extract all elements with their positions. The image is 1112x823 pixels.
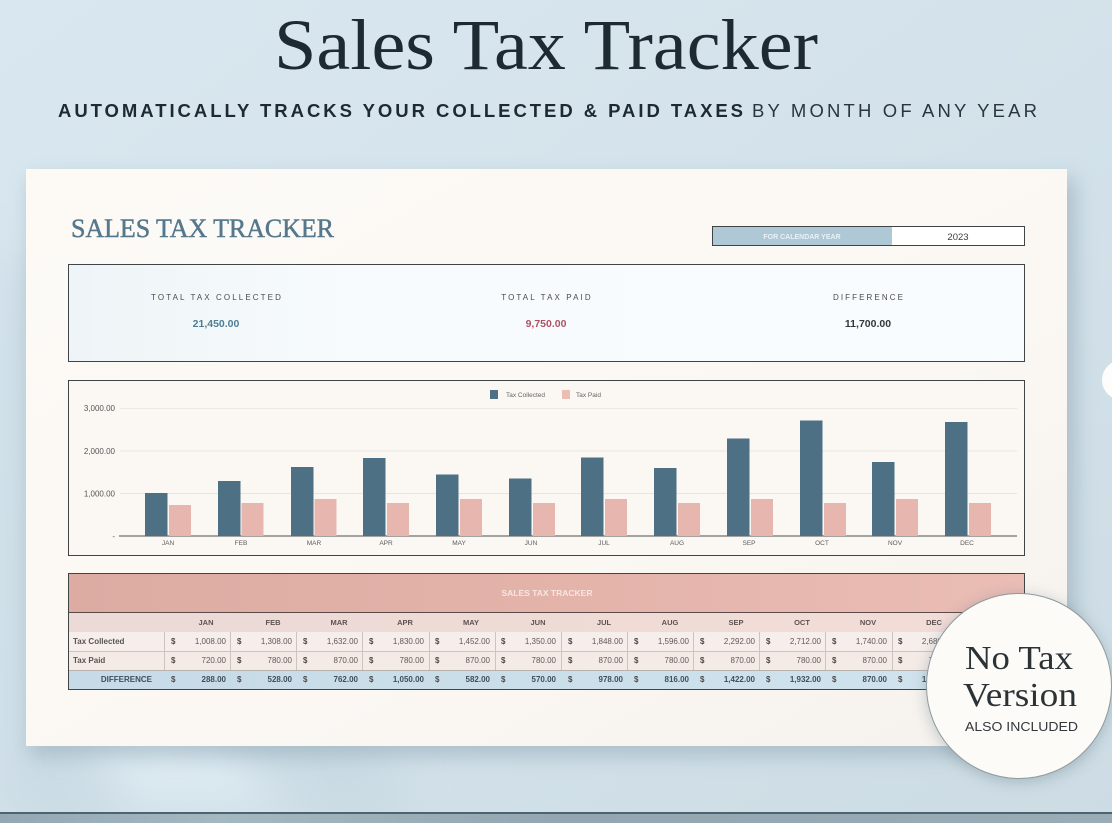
month labels: JUN: [525, 540, 538, 547]
dollar signs: $: [237, 637, 242, 646]
difference row: 978.00: [599, 675, 624, 684]
dollar signs: $: [766, 656, 771, 665]
sheet heading: SALES TAX TRACKER: [71, 214, 335, 243]
difference row: 1,932.00: [790, 675, 822, 684]
month labels: AUG: [670, 540, 684, 547]
difference: [833, 293, 905, 330]
calendar year selector: FOR CALENDAR YEAR: [763, 234, 841, 241]
tax collected row: 2,712.00: [790, 637, 822, 646]
dollar signs: $: [237, 656, 242, 665]
tax collected row: 2,680.00: [922, 637, 954, 646]
month labels: MAR: [307, 540, 322, 547]
dollar signs: $: [501, 656, 506, 665]
month labels: FEB: [235, 540, 247, 547]
callout: no tax version badge: No Tax: [965, 640, 1073, 677]
tax paid row: 870.00: [599, 656, 624, 665]
tax collected row: 1,008.00: [195, 637, 227, 646]
difference row: 1,050.00: [393, 675, 425, 684]
dollar signs: $: [832, 675, 837, 684]
tax paid row: 720.00: [202, 656, 227, 665]
tax collected row: [69, 632, 1025, 651]
subtitle: AUTOMATICALLY TRACKS YOUR COLLECTED & PAID TAXES: [58, 100, 743, 121]
table month header: APR: [397, 618, 413, 627]
difference row: 288.00: [202, 675, 227, 684]
dollar signs: $: [766, 637, 771, 646]
dollar signs: $: [369, 656, 374, 665]
dollar signs: $: [369, 637, 374, 646]
tax collected row: 1,596.00: [658, 637, 690, 646]
table month header: DEC: [926, 618, 942, 627]
tax collected row: 1,740.00: [856, 637, 888, 646]
table month header: JUL: [597, 618, 612, 627]
total tax paid: TOTAL TAX PAID: [501, 293, 593, 302]
dollar signs: $: [700, 656, 705, 665]
month labels: NOV: [888, 540, 903, 547]
chart axes: 2,000.00: [84, 447, 116, 456]
callout: no tax version badge: [926, 594, 1112, 781]
difference row: 1,900.00: [922, 675, 954, 684]
dollar signs: $: [435, 637, 440, 646]
dollar signs: $: [766, 675, 771, 684]
tax collected row: 1,830.00: [393, 637, 425, 646]
tax paid bars: [169, 499, 991, 536]
dollar signs: $: [303, 675, 308, 684]
chart axes: 1,000.00: [84, 490, 116, 498]
table month header: AUG: [662, 618, 678, 627]
dollar signs: $: [634, 675, 639, 684]
tax collected bars: [145, 420, 968, 536]
total tax paid: 9,750.00: [526, 318, 567, 330]
chart legend: Tax Collected: [506, 392, 545, 399]
difference row: 870.00: [863, 675, 888, 684]
total tax collected: 21,450.00: [193, 318, 240, 330]
difference row: 528.00: [268, 675, 293, 684]
month labels: JAN: [162, 540, 174, 547]
tax paid row: 870.00: [334, 656, 359, 665]
table month header: NOV: [860, 618, 876, 627]
calendar year selector: [712, 226, 1024, 246]
difference row: 1,422.00: [724, 675, 756, 684]
total tax paid: [501, 293, 593, 330]
tax paid row: 780.00: [400, 656, 425, 665]
tax paid row: [69, 651, 1025, 670]
month labels: JUL: [598, 540, 610, 547]
difference row: 582.00: [466, 675, 491, 684]
tax collected row: 1,350.00: [525, 637, 557, 646]
dollar signs: $: [303, 637, 308, 646]
dollar signs: $: [501, 675, 506, 684]
dollar signs: $: [435, 656, 440, 665]
tax paid row: 780.00: [532, 656, 557, 665]
table month header: MAR: [330, 618, 348, 627]
calendar year selector: 2023: [947, 232, 969, 243]
tax paid row: 870.00: [466, 656, 491, 665]
tax paid row: 780.00: [929, 656, 954, 665]
difference: DIFFERENCE: [833, 293, 905, 302]
panel: totals summary: [68, 264, 1024, 362]
chart axes: -: [112, 532, 115, 541]
dollar signs: $: [898, 637, 903, 646]
month labels: DEC: [960, 540, 974, 547]
dollar signs: $: [171, 675, 176, 684]
difference row: 816.00: [665, 675, 690, 684]
tax paid row: Tax Paid: [73, 656, 105, 665]
dollar signs: $: [898, 656, 903, 665]
panel: spreadsheet card: [26, 169, 1067, 746]
dollar signs: $: [369, 675, 374, 684]
panel: monthly data table: [68, 574, 1025, 690]
difference row: [69, 670, 1025, 689]
month labels: APR: [379, 540, 393, 547]
dollar signs: [171, 637, 903, 684]
callout: no tax version badge: Version: [963, 677, 1077, 714]
dollar signs: $: [700, 675, 705, 684]
subtitle: [58, 100, 1037, 121]
month labels: MAY: [452, 540, 466, 547]
tax paid row: 870.00: [731, 656, 756, 665]
table month header: MAY: [463, 618, 479, 627]
table month header: SEP: [728, 618, 744, 627]
tax collected row: 1,452.00: [459, 637, 491, 646]
subtitle: BY MONTH OF ANY YEAR: [752, 100, 1037, 121]
table month header: JAN: [198, 618, 214, 627]
month labels: SEP: [742, 540, 756, 547]
title: Sales Tax Tracker: [274, 5, 818, 85]
tax collected row: 1,308.00: [261, 637, 293, 646]
dollar signs: $: [171, 656, 176, 665]
table month header: JUN: [530, 618, 546, 627]
total tax collected: TOTAL TAX COLLECTED: [151, 293, 283, 302]
tax paid row: 780.00: [665, 656, 690, 665]
table month header: [69, 612, 1025, 632]
dollar signs: $: [435, 675, 440, 684]
dollar signs: $: [634, 637, 639, 646]
chart axes: 3,000.00: [84, 404, 116, 413]
difference row: 570.00: [532, 675, 557, 684]
table month header: FEB: [266, 618, 281, 627]
chart legend: Tax Paid: [576, 392, 601, 399]
tax paid row: 780.00: [797, 656, 822, 665]
chart legend: [490, 390, 601, 399]
month labels: OCT: [815, 540, 829, 547]
dollar signs: $: [501, 637, 506, 646]
card shadow: [30, 178, 1076, 756]
dollar signs: $: [568, 656, 573, 665]
table month header: OCT: [794, 618, 810, 627]
dollar signs: $: [898, 675, 903, 684]
carousel handle: [1102, 360, 1112, 400]
dollar signs: $: [832, 656, 837, 665]
dollar signs: $: [568, 675, 573, 684]
difference row: 762.00: [334, 675, 359, 684]
dollar signs: $: [237, 675, 242, 684]
difference: 11,700.00: [845, 318, 891, 330]
dollar signs: $: [303, 656, 308, 665]
dollar signs: $: [568, 637, 573, 646]
table banner: SALES TAX TRACKER: [502, 588, 592, 598]
bottom band: [0, 812, 1112, 823]
dollar signs: $: [634, 656, 639, 665]
panel: bar chart: [68, 380, 1024, 556]
dollar signs: $: [832, 637, 837, 646]
difference row: DIFFERENCE: [101, 675, 153, 684]
tax collected row: 1,632.00: [327, 637, 359, 646]
tax collected row: Tax Collected: [73, 637, 125, 646]
callout: no tax version badge: ALSO INCLUDED: [965, 719, 1078, 734]
table banner: [69, 574, 1025, 612]
tax paid row: 780.00: [268, 656, 293, 665]
total tax collected: [151, 293, 283, 330]
tax collected row: 2,292.00: [724, 637, 756, 646]
month labels: [162, 540, 974, 547]
tax paid row: 870.00: [863, 656, 888, 665]
tax collected row: 1,848.00: [592, 637, 624, 646]
chart axes: [84, 404, 1017, 541]
dollar signs: $: [171, 637, 176, 646]
dollar signs: $: [700, 637, 705, 646]
